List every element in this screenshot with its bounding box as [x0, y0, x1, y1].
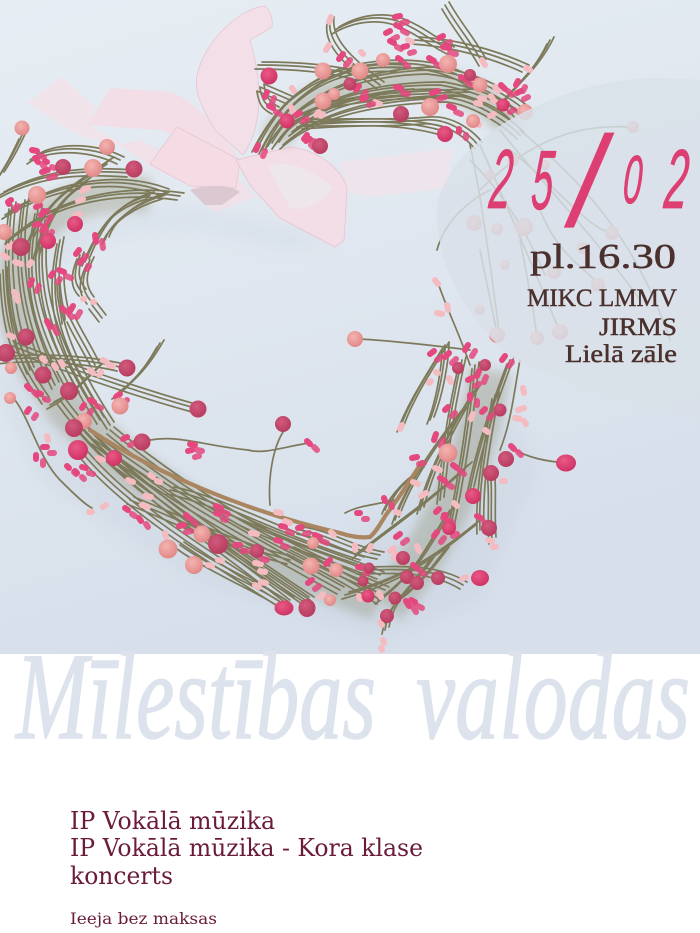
venue: Lielā zāle	[565, 341, 677, 368]
hot pink buds	[8, 16, 521, 606]
programme text: IP Vokālā mūzika - Kora klase	[70, 834, 423, 862]
date: 25/02: 0	[621, 142, 645, 218]
stems under translucent circle	[437, 127, 670, 340]
stems: lower band	[60, 400, 385, 605]
title: valodas	[416, 628, 690, 765]
programme text: koncerts	[70, 862, 173, 890]
stems	[0, 5, 550, 630]
hot pink buds: extra cluster	[15, 22, 528, 612]
ribbon bow	[27, 6, 452, 247]
venue: MIKC LMMV	[527, 285, 677, 312]
stems: second offset copy	[0, 9, 547, 634]
programme text: IP Vokālā mūzika	[70, 807, 275, 835]
stems: left side	[0, 200, 195, 425]
berries: left lobe	[0, 120, 291, 466]
date: 25/02: 5	[529, 133, 558, 227]
stems: right side	[345, 345, 510, 630]
title: Mīlestības	[14, 628, 376, 765]
admission note: Ieeja bez maksas	[70, 909, 217, 928]
berries: top right lobe	[260, 53, 510, 154]
main brown branch	[90, 430, 422, 537]
berries: faded under circle	[466, 104, 651, 364]
date: 25/02: 2	[661, 134, 692, 227]
berries: lower band	[158, 526, 343, 617]
wreath body mass	[14, 80, 510, 605]
time: pl.16.30	[530, 237, 676, 276]
background photo	[0, 0, 700, 654]
programme text	[70, 807, 423, 890]
title	[14, 628, 690, 765]
long single stems	[15, 280, 565, 513]
stems: offset copy	[4, 2, 554, 627]
stems: top right lobe	[255, 5, 550, 150]
pale buds	[3, 17, 530, 650]
white lower panel	[0, 654, 700, 933]
stems: left lobe	[0, 135, 180, 365]
date: 25/02	[486, 112, 692, 254]
wreath	[0, 2, 670, 650]
venue: JIRMS	[599, 314, 677, 341]
berries: right side	[347, 331, 576, 623]
translucent date circle	[437, 78, 700, 420]
wreath shadow	[0, 205, 540, 640]
date: 25/02: 2	[486, 133, 517, 226]
date: 25/02: /	[564, 112, 614, 254]
venue	[527, 285, 677, 368]
